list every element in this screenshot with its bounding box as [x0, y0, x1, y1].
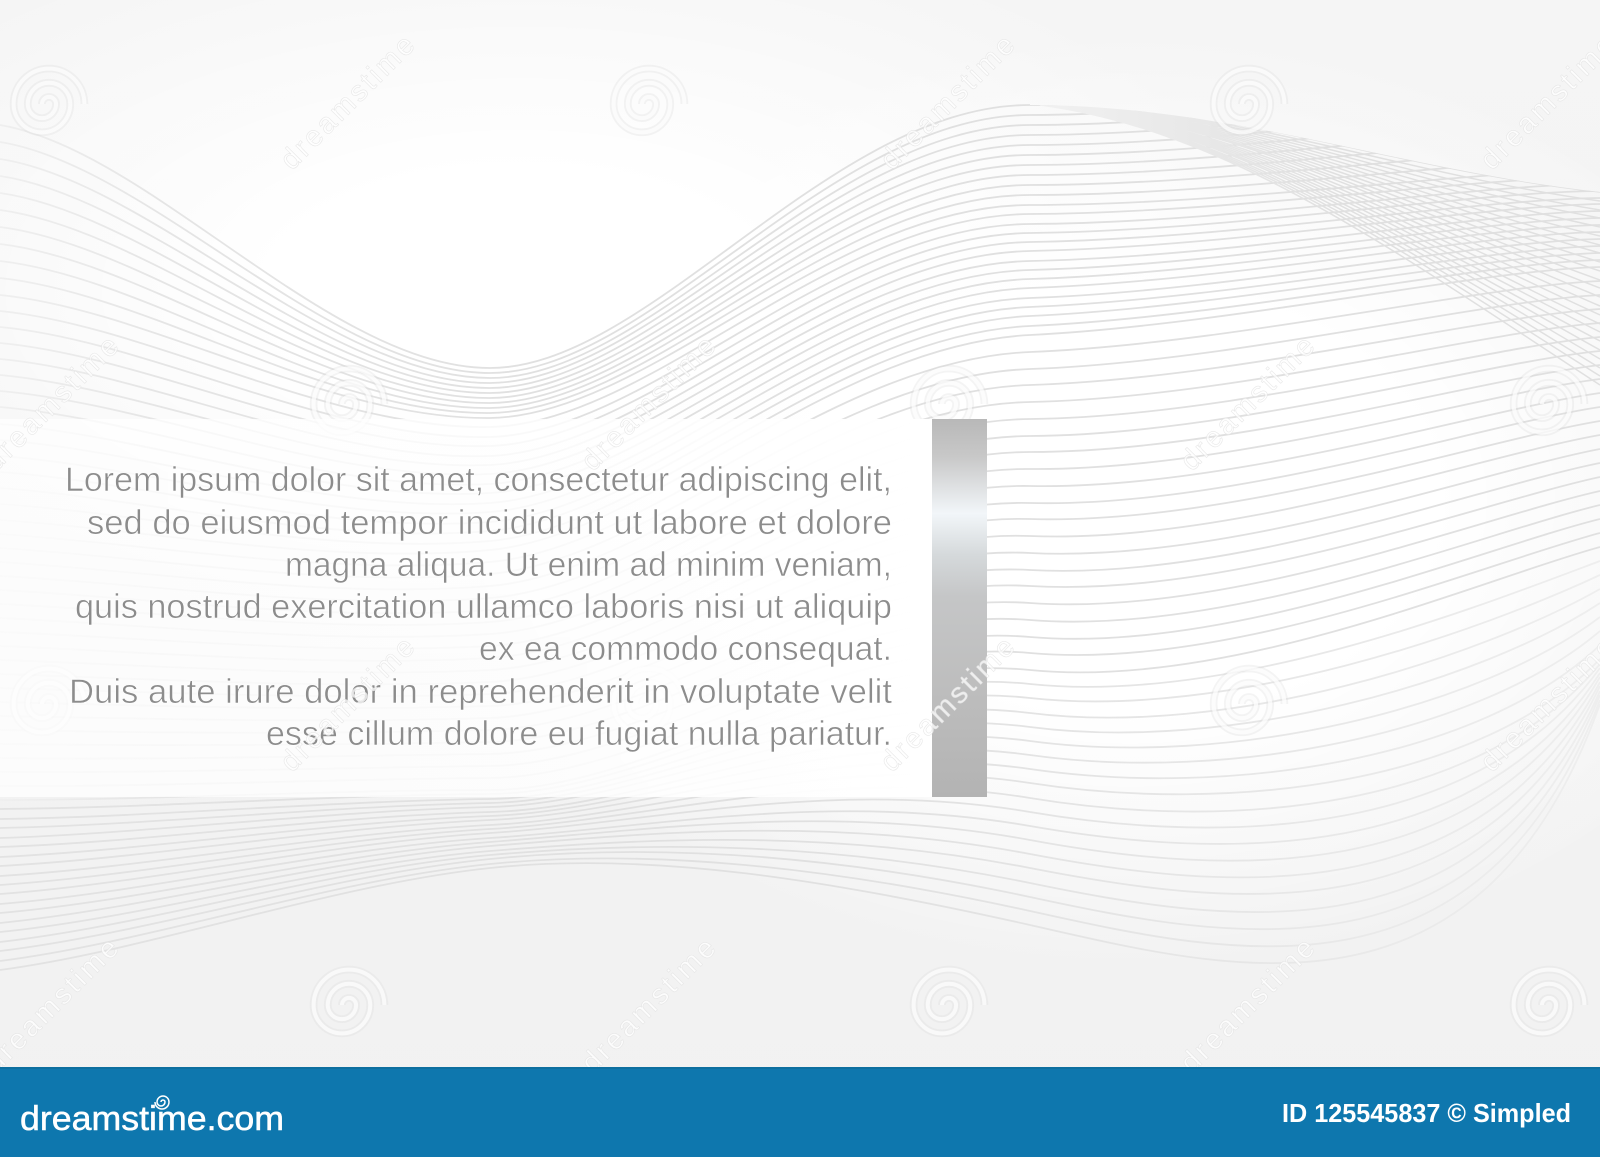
watermark diagonal text: dreamstime: [575, 330, 722, 477]
watermark diagonal text: dreamstime: [274, 29, 421, 176]
watermark diagonal text: dreamstime: [874, 29, 1021, 176]
footer image credit: ID 125545837 © Simpled: [1282, 1098, 1571, 1128]
watermark diagonal text: dreamstime: [1174, 932, 1321, 1079]
panel body text: ex ea commodo consequat.: [479, 630, 892, 668]
watermark diagonal text: dreamstime: [575, 932, 722, 1079]
crossing mesh lines, upper right: [1040, 105, 1600, 385]
watermark diagonal text: dreamstime: [274, 631, 421, 778]
icon: logo spiral: [155, 1096, 169, 1109]
panel body text: sed do eiusmod tempor incididunt ut labore et dolore: [87, 504, 892, 542]
footer logo: dreamstime.com: [20, 1100, 284, 1138]
text panel: [0, 419, 987, 797]
panel body text: Lorem ipsum dolor sit amet, consectetur adipiscing elit,: [65, 461, 892, 499]
lower wave lines: [0, 561, 1600, 970]
upper wave lines: [0, 60, 1600, 800]
watermark diagonal text: dreamstime: [874, 631, 1021, 778]
panel body text: quis nostrud exercitation ullamco laboris nisi ut aliquip: [75, 588, 892, 626]
wave line ribbon: [0, 60, 1600, 970]
footer bar: [0, 1067, 1600, 1157]
panel body text: esse cillum dolore eu fugiat nulla pariatur.: [266, 715, 892, 753]
panel body text: magna aliqua. Ut enim ad minim veniam,: [285, 546, 892, 584]
panel body text: Duis aute irure dolor in reprehenderit in voluptate velit: [69, 673, 893, 711]
watermark diagonal text: dreamstime: [1174, 330, 1321, 477]
metallic side bar: [932, 419, 987, 797]
panel body text: [65, 461, 893, 753]
panel background: [0, 419, 932, 797]
